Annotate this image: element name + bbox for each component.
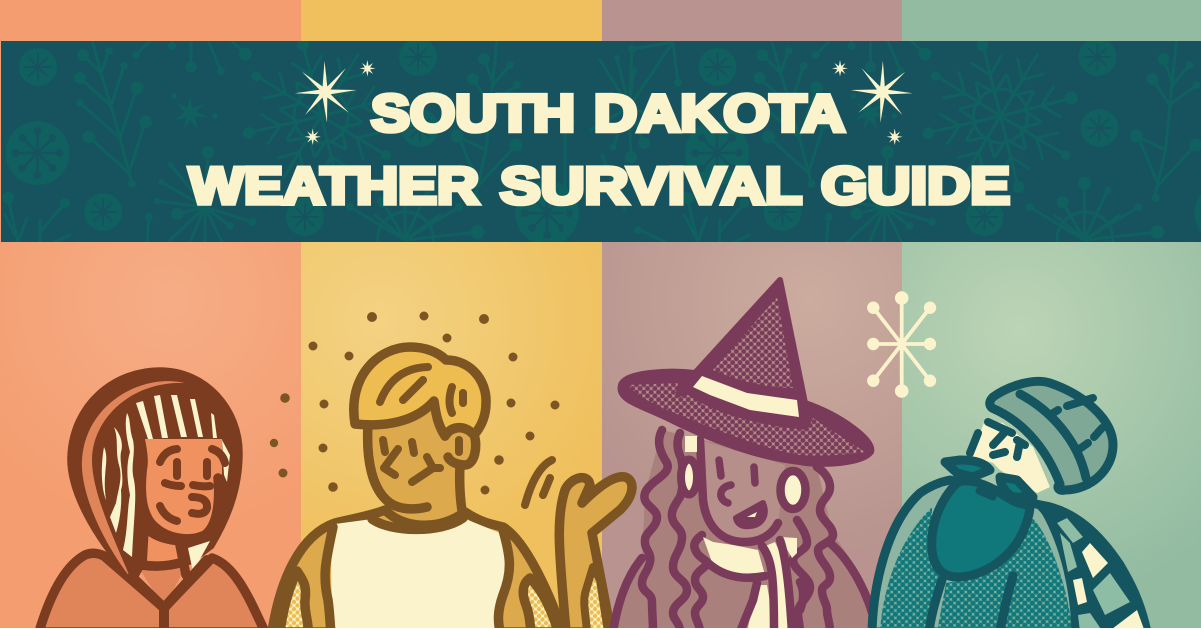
title: [189, 85, 1010, 216]
sparkles: right: [832, 60, 913, 145]
ear: [445, 428, 476, 465]
title: WEATHER: [189, 158, 479, 216]
hood: [72, 372, 238, 577]
sleeve polka panels: [280, 571, 308, 629]
hair and coat: [613, 430, 877, 629]
title: SOUTH: [371, 85, 575, 143]
panel: orange background: [0, 0, 301, 628]
beard: [932, 481, 1030, 577]
scarf: [703, 537, 765, 575]
face: [704, 442, 785, 538]
earrings: [681, 460, 697, 494]
hair: [354, 347, 486, 436]
neck and face: [372, 411, 458, 520]
moustache: [945, 460, 990, 477]
character: man with blond hair: [272, 347, 632, 629]
face: [145, 439, 222, 538]
hat band: [693, 376, 799, 417]
coat seams: [132, 560, 207, 629]
beanie: [990, 381, 1113, 490]
sparkles: left: [295, 60, 376, 145]
raised arm and hand: [559, 477, 632, 629]
hat shape: [621, 280, 871, 464]
neck: [147, 536, 178, 562]
witch hat: [621, 280, 871, 464]
hair waves: [642, 430, 833, 629]
face features: [160, 449, 225, 521]
panel: mauve background: [602, 0, 902, 628]
banner: title band: [1, 41, 1201, 242]
face: [973, 420, 1050, 493]
sweater: [872, 480, 1078, 629]
mouth: [736, 503, 765, 526]
dust dots: [270, 312, 560, 494]
hair highlight: [685, 436, 697, 452]
face features: [383, 440, 440, 482]
icon: snowflake: [867, 291, 936, 398]
face features: [719, 460, 755, 503]
hand motion lines: [525, 460, 552, 505]
title: DAKOTA: [594, 85, 845, 143]
cream collar: [188, 541, 210, 572]
title: SURVIVAL: [500, 158, 801, 216]
panel: yellow background: [301, 0, 602, 628]
character: woman in witch hat: [613, 280, 877, 629]
striped scarf: [1040, 505, 1147, 629]
orange coat: [39, 553, 265, 629]
cream hair strands: [102, 395, 230, 557]
character: woman in orange hood: [39, 372, 265, 629]
torso with sleeves: [272, 510, 563, 629]
title: GUIDE: [821, 158, 1010, 216]
character: bearded man in beanie: [872, 381, 1147, 629]
panel: green background: [902, 0, 1201, 628]
